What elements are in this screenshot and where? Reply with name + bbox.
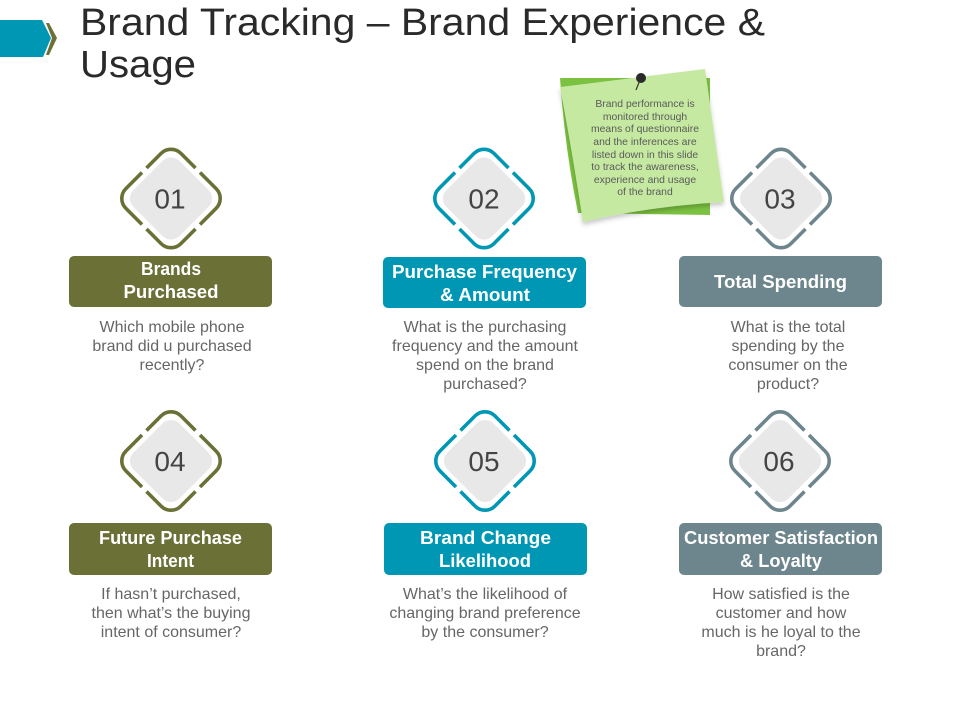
text: question 01: recently? <box>140 357 205 374</box>
label: total spending: Total Spending <box>714 272 847 292</box>
text: question 06: How satisfied is the <box>712 586 850 603</box>
text: question 04: intent of consumer? <box>101 624 241 641</box>
icon: diamond 02: 02 <box>468 184 500 214</box>
text: question 04: If hasn’t purchased, <box>101 586 241 603</box>
text: question 04: then what’s the buying <box>92 605 250 622</box>
text: question 02: What is the purchasing <box>404 319 566 336</box>
icon: diamond 05 <box>436 412 534 510</box>
text: question 06: brand? <box>756 643 806 660</box>
text: note: monitored through <box>603 112 687 123</box>
text: note: Brand performance is <box>595 99 695 110</box>
text: question 04 <box>92 586 250 641</box>
text: question 01 <box>92 319 252 374</box>
text: question 06 <box>701 586 861 660</box>
label: customer satisfaction and loyalty: & Loyalty <box>740 551 822 571</box>
text: question 01: Which mobile phone <box>100 319 245 336</box>
label: brands purchased: Purchased <box>124 282 218 302</box>
text: note <box>591 99 699 198</box>
icon: pin <box>636 73 646 90</box>
text: question 03: consumer on the <box>728 357 848 374</box>
text: question 03: What is the total <box>731 319 845 336</box>
icon: diamond 04: 04 <box>154 446 186 477</box>
label: brand change likelihood: Brand Change <box>420 528 551 548</box>
label: total spending <box>679 256 882 307</box>
text: question 01: brand did u purchased <box>92 338 252 355</box>
header icon: chevron arrow <box>0 20 57 57</box>
text: question 05: by the consumer? <box>421 624 549 641</box>
text: note: experience and usage <box>594 175 696 186</box>
panel: 05 brand change likelihood <box>384 412 587 641</box>
icon: diamond 03 <box>732 149 830 248</box>
text: note: listed down in this slide <box>592 150 698 161</box>
text: question 02 <box>392 319 579 393</box>
title: Brand Tracking – Brand Experience & <box>80 2 765 44</box>
panel: 01 brands purchased <box>69 149 272 374</box>
text: note: means of questionnaire <box>591 124 699 135</box>
icon: diamond 05: 05 <box>468 446 500 477</box>
panel: 04 future purchase intent <box>69 412 272 641</box>
label: purchase frequency and amount: Purchase Frequency <box>392 262 577 282</box>
text: question 03: product? <box>757 376 819 393</box>
label: future purchase intent: Intent <box>147 551 194 571</box>
icon: diamond 01: 01 <box>154 184 186 214</box>
title: Usage <box>80 44 196 86</box>
text: question 06: much is he loyal to the <box>701 624 861 641</box>
label: brand change likelihood: Likelihood <box>439 551 531 571</box>
panel: 03 total spending <box>679 149 882 393</box>
callout: sticky note <box>560 69 724 222</box>
label: future purchase intent <box>69 523 272 575</box>
text: question 06: customer and how <box>716 605 847 622</box>
text: question 03 <box>728 319 848 393</box>
icon: diamond 06: 06 <box>763 446 795 477</box>
text: note: and the inferences are <box>593 137 697 148</box>
label: purchase frequency and amount: & Amount <box>440 285 530 305</box>
text: question 03: spending by the <box>732 338 845 355</box>
panel: 06 customer satisfaction and loyalty <box>679 412 882 660</box>
icon: diamond 01 <box>122 149 220 248</box>
label: future purchase intent: Future Purchase <box>99 528 242 548</box>
icon: diamond 03: 03 <box>764 184 796 214</box>
label: brand change likelihood <box>384 523 587 575</box>
text: note: of the brand <box>617 187 673 198</box>
text: question 02: purchased? <box>443 376 527 393</box>
icon: diamond 04 <box>122 412 220 510</box>
title <box>80 2 765 86</box>
text: question 05: changing brand preference <box>389 605 581 622</box>
panel: 02 purchase frequency <box>383 149 586 393</box>
label: purchase frequency and amount <box>383 257 586 308</box>
label: customer satisfaction and loyalty: Customer Satisfaction <box>684 528 878 548</box>
icon: diamond 02 <box>435 149 533 248</box>
text: note: to track the awareness, <box>591 162 699 173</box>
label: customer satisfaction and loyalty <box>679 523 882 575</box>
text: question 02: spend on the brand <box>416 357 554 374</box>
icon: diamond 06 <box>731 412 829 510</box>
text: question 05 <box>389 586 581 641</box>
text: question 05: What’s the likelihood of <box>403 586 568 603</box>
label: brands purchased <box>69 256 272 307</box>
text: question 02: frequency and the amount <box>392 338 579 355</box>
label: brands purchased: Brands <box>141 259 201 279</box>
